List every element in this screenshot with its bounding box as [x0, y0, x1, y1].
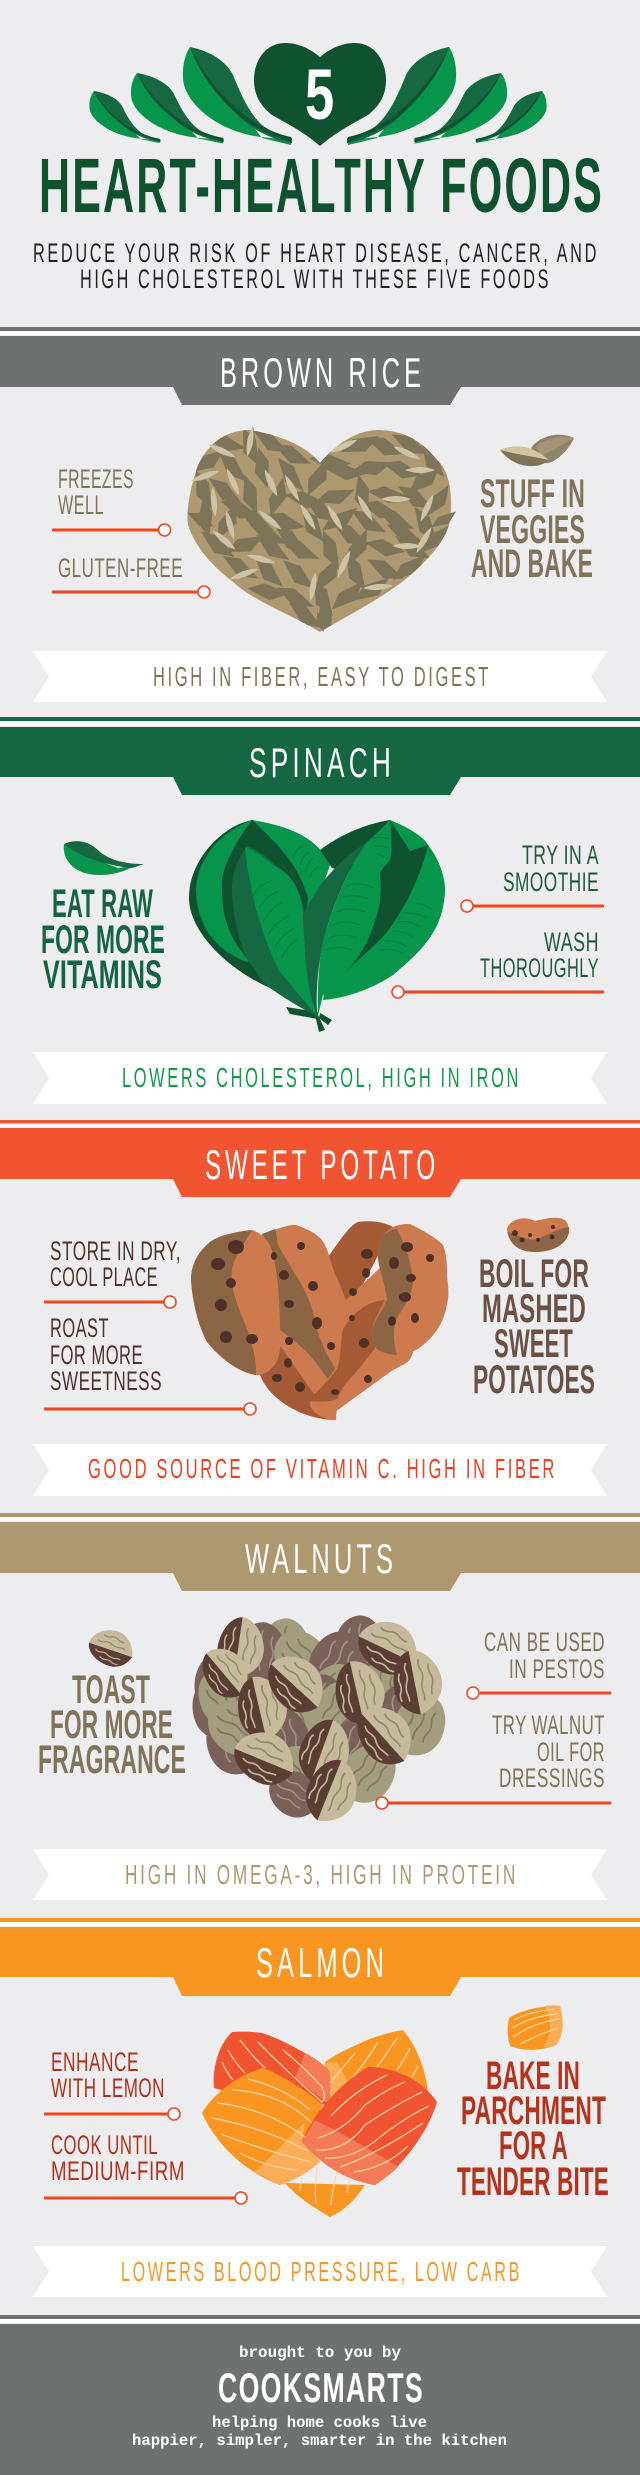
- tip: gluten-free: [52, 553, 210, 598]
- callout: stuff in veggies and bake: [471, 472, 593, 586]
- footer: [0, 2315, 640, 2475]
- section header: sweet potato: SWEET POTATO: [205, 1141, 439, 1188]
- panel: spinach: [0, 717, 640, 1104]
- tip: wash thoroughly: WASH: [544, 927, 599, 957]
- icon: walnut: [84, 1623, 139, 1673]
- icon: sweet potato: [507, 1218, 569, 1252]
- section header: brown rice: [0, 327, 640, 405]
- footer tagline: helping home cooks live: [212, 2414, 427, 2432]
- subtitle: [33, 238, 599, 294]
- tip: try in a smoothie: TRY IN A: [522, 840, 599, 870]
- heart of sweet potatoes: [191, 1221, 448, 1420]
- ribbon: walnut benefits: [33, 1849, 607, 1900]
- callout: boil for mashed sweet potatoes: SWEET: [494, 1322, 573, 1366]
- section header: salmon: SALMON: [256, 1939, 388, 1986]
- icon: left small leaf: [89, 91, 160, 143]
- section header: brown rice: BROWN RICE: [220, 349, 425, 396]
- callout: toast for more fragrance: [38, 1668, 186, 1782]
- tip: wash thoroughly: [392, 927, 604, 998]
- section header: spinach: [0, 717, 640, 795]
- tip: cook until medium-firm: COOK UNTIL: [51, 2130, 158, 2160]
- icon: heart with number 5: [254, 43, 386, 146]
- tip: freezes well: WELL: [58, 490, 104, 520]
- heart of spinach leaves: [189, 820, 445, 1032]
- panel: brown rice: [0, 327, 640, 702]
- heart of salmon fillets: [202, 2030, 437, 2217]
- callout: bake in parchment for a tender bite: FOR A: [499, 2124, 568, 2168]
- tip: store in dry, cool place: COOL PLACE: [50, 1262, 158, 1292]
- callout: eat raw for more vitamins: FOR MORE: [41, 918, 165, 962]
- panel: sweet potato: [0, 1120, 640, 1496]
- tip: store in dry, cool place: [44, 1236, 181, 1308]
- tip: store in dry, cool place: STORE IN DRY,: [50, 1236, 181, 1266]
- footer logo: cooksmarts: COOKSMARTS: [218, 2364, 424, 2411]
- tip: roast for more sweetness: SWEETNESS: [50, 1366, 162, 1396]
- icon: left large leaf: [183, 47, 292, 145]
- icon: right small leaf: [476, 91, 547, 143]
- ribbon: sweet potato benefits: [33, 1444, 607, 1496]
- section header: salmon: [0, 1918, 640, 1996]
- callout: eat raw for more vitamins: [41, 882, 165, 997]
- footer credit: brought to you by: [239, 2344, 401, 2362]
- icon: right medium leaf: [414, 73, 507, 144]
- icon: salmon fillet: [508, 2005, 563, 2050]
- ribbon: spinach benefits: [33, 1052, 607, 1104]
- callout: bake in parchment for a tender bite: [457, 2054, 609, 2204]
- section header: walnuts: WALNUTS: [245, 1535, 397, 1582]
- ribbon: salmon benefits: [33, 2246, 607, 2297]
- icon: spinach leaf: [64, 841, 144, 875]
- tip: gluten-free: GLUTEN-FREE: [58, 553, 183, 583]
- icon: left medium leaf: [131, 73, 224, 144]
- heart of rice grains: [180, 423, 460, 640]
- callout: toast for more fragrance: FOR MORE: [50, 1703, 173, 1747]
- tip: enhance with lemon: WITH LEMON: [51, 2073, 165, 2103]
- callout: eat raw for more vitamins: EAT RAW: [52, 882, 153, 926]
- tip: try walnut oil for dressings: [376, 1710, 611, 1809]
- icon: right large leaf: [347, 47, 456, 145]
- tip: roast for more sweetness: [44, 1313, 256, 1415]
- panel: walnuts: [0, 1513, 640, 1900]
- callout: eat raw for more vitamins: VITAMINS: [43, 953, 162, 997]
- section header: sweet potato: [0, 1120, 640, 1197]
- tip: freezes well: FREEZES: [58, 464, 134, 494]
- tip: enhance with lemon: [44, 2047, 180, 2120]
- footer tagline: happier, simpler, smarter in the kitchen: [132, 2432, 507, 2450]
- callout: toast for more fragrance: TOAST: [72, 1668, 150, 1712]
- footer tagline: [132, 2414, 507, 2450]
- tip: cook until medium-firm: MEDIUM-FIRM: [51, 2156, 185, 2186]
- tip: roast for more sweetness: FOR MORE: [50, 1340, 143, 1370]
- callout: boil for mashed sweet potatoes: [473, 1252, 595, 1402]
- tip: can be used in pestos: [467, 1627, 611, 1699]
- tip: freezes well: [52, 464, 170, 536]
- section header: walnuts: [0, 1513, 640, 1591]
- tip: roast for more sweetness: ROAST: [50, 1313, 109, 1343]
- callout: toast for more fragrance: FRAGRANCE: [38, 1738, 186, 1782]
- icon: rice grains: [500, 435, 574, 466]
- section header: spinach: SPINACH: [249, 739, 395, 786]
- header logo: heart and leaves: [89, 43, 547, 146]
- heart of walnuts: [186, 1610, 455, 1832]
- panel: salmon: [0, 1918, 640, 2297]
- icon: heart with number 5: 5: [305, 56, 335, 135]
- tip: cook until medium-firm: [44, 2130, 247, 2204]
- tip: enhance with lemon: ENHANCE: [51, 2047, 139, 2077]
- tip: try in a smoothie: [461, 840, 604, 912]
- ribbon: rice benefits: [33, 651, 607, 702]
